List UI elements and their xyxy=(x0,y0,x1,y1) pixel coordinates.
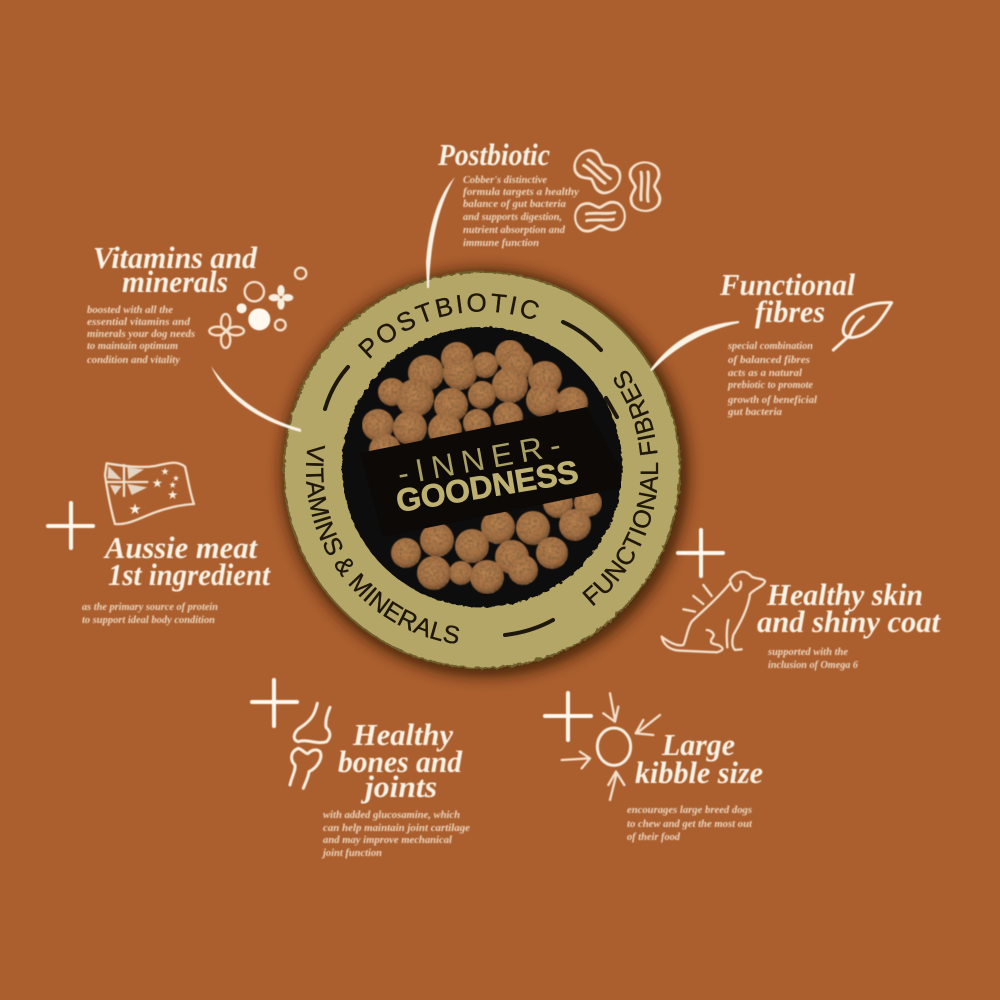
icon: minerals xyxy=(209,268,306,348)
connector arrows xyxy=(211,177,739,432)
heading: aussie meat: Aussie meat xyxy=(103,530,258,565)
panel: aussie meat xyxy=(48,463,271,626)
gold ring xyxy=(284,272,680,668)
text: vitamins description: boosted with all the xyxy=(87,305,173,316)
text: postbiotic description: nutrient absorption and xyxy=(463,225,566,236)
band title: inner: -INNER- xyxy=(395,426,563,492)
heading: healthy skin: and shiny coat xyxy=(757,604,941,639)
ring label: vitamins and minerals: VITAMINS & MINERALS xyxy=(306,446,460,644)
text: postbiotic description: formula targets a healthy xyxy=(463,187,579,198)
panel: central badge xyxy=(271,259,699,687)
text: fibres description xyxy=(727,341,817,418)
text: aussie description: to support ideal body condition xyxy=(82,615,215,626)
heading: functional fibres: Functional xyxy=(719,267,855,302)
text: skin description xyxy=(767,647,859,671)
heading: large kibble size: Large xyxy=(661,727,735,762)
icon: gut bacteria xyxy=(569,145,660,232)
icon: plus xyxy=(678,530,723,576)
heading: aussie meat: 1st ingredient xyxy=(108,557,271,592)
text: bones description: and may improve mechanical xyxy=(323,835,452,846)
icon: leaf xyxy=(833,303,892,350)
icon: knee joint xyxy=(290,703,330,788)
icon: plus xyxy=(252,680,297,726)
text: postbiotic description: immune function xyxy=(463,238,539,249)
text: vitamins description: minerals your dog needs xyxy=(87,329,195,340)
text: vitamins description: to maintain optimum xyxy=(87,341,178,352)
ring dashes xyxy=(325,322,617,635)
heading: postbiotic: Postbiotic xyxy=(437,137,550,172)
panel: vitamins and minerals xyxy=(87,240,306,366)
connector: postbiotic xyxy=(426,177,455,288)
text: fibres description: special combination xyxy=(727,341,813,352)
text: bones description: joint function xyxy=(321,848,382,859)
heading: aussie meat xyxy=(103,530,271,592)
band title: goodness: GOODNESS xyxy=(393,453,581,519)
text: fibres description: acts as a natural xyxy=(728,368,802,379)
panel: healthy bones xyxy=(252,680,470,859)
text: bones description: can help maintain joint cartilage xyxy=(323,823,470,834)
text: vitamins description: essential vitamins and xyxy=(87,317,191,328)
icon: plus xyxy=(48,503,93,548)
text: fibres description: of balanced fibres xyxy=(728,355,810,366)
heading: vitamins and minerals xyxy=(93,240,257,299)
heading: large kibble size xyxy=(635,727,763,790)
heading: vitamins and minerals: minerals xyxy=(122,264,228,299)
heading: healthy bones and joints: joints xyxy=(360,769,437,804)
panel: functional fibres xyxy=(719,267,892,418)
text: vitamins description xyxy=(87,305,195,366)
black band xyxy=(360,407,621,537)
text: kibble description: encourages large breed dogs xyxy=(627,805,752,816)
panel: postbiotic xyxy=(437,137,660,249)
text: fibres description: growth of beneficial xyxy=(727,395,817,406)
text: fibres description: gut bacteria xyxy=(727,407,782,418)
connector: vitamins xyxy=(211,366,301,432)
text: postbiotic description xyxy=(463,175,579,249)
panel: healthy skin xyxy=(662,530,941,671)
text: bones description: with added glucosamine, which xyxy=(323,810,460,821)
heading: vitamins and minerals: Vitamins and xyxy=(93,240,257,275)
text: kibble description: to chew and get the most out xyxy=(627,819,753,830)
text: vitamins description: condition and vitality xyxy=(87,355,180,366)
icon: kibble with arrows xyxy=(562,693,660,800)
heading: functional fibres: fibres xyxy=(755,294,825,329)
icon: dog xyxy=(662,572,765,652)
heading: healthy bones and joints: bones and xyxy=(338,744,462,779)
text: kibble description xyxy=(627,805,753,843)
kibble pile xyxy=(362,340,602,594)
icon: australian flag xyxy=(105,463,194,524)
heading: healthy skin: Healthy skin xyxy=(766,577,923,612)
ring label: postbiotic: POSTBIOTIC xyxy=(358,293,539,359)
text: aussie description xyxy=(82,602,218,626)
text: skin description: supported with the xyxy=(767,647,848,658)
connector: functional fibres xyxy=(650,321,739,371)
text: fibres description: prebiotic to promote xyxy=(727,380,813,391)
badge shadow xyxy=(281,269,689,677)
heading: large kibble size: kibble size xyxy=(635,755,763,790)
icon: plus xyxy=(545,693,591,740)
heading: healthy bones and joints xyxy=(338,717,462,804)
text: postbiotic description: Cobber's distinctive xyxy=(463,175,547,186)
heading: functional fibres xyxy=(719,267,855,329)
heading: healthy skin xyxy=(757,577,941,639)
heading: healthy bones and joints: Healthy xyxy=(352,717,453,752)
text: kibble description: of their food xyxy=(627,832,681,843)
text: bones description xyxy=(321,810,470,859)
text: aussie description: as the primary source of protein xyxy=(82,602,218,613)
text: postbiotic description: and supports digestion, xyxy=(463,212,562,223)
ring label: functional fibres: FUNCTIONAL FIBRES xyxy=(582,370,658,606)
text: skin description: inclusion of Omega 6 xyxy=(768,660,859,671)
text: postbiotic description: balance of gut bacteria xyxy=(463,199,566,210)
black ink circle xyxy=(342,327,622,607)
panel: large kibble xyxy=(545,693,763,843)
